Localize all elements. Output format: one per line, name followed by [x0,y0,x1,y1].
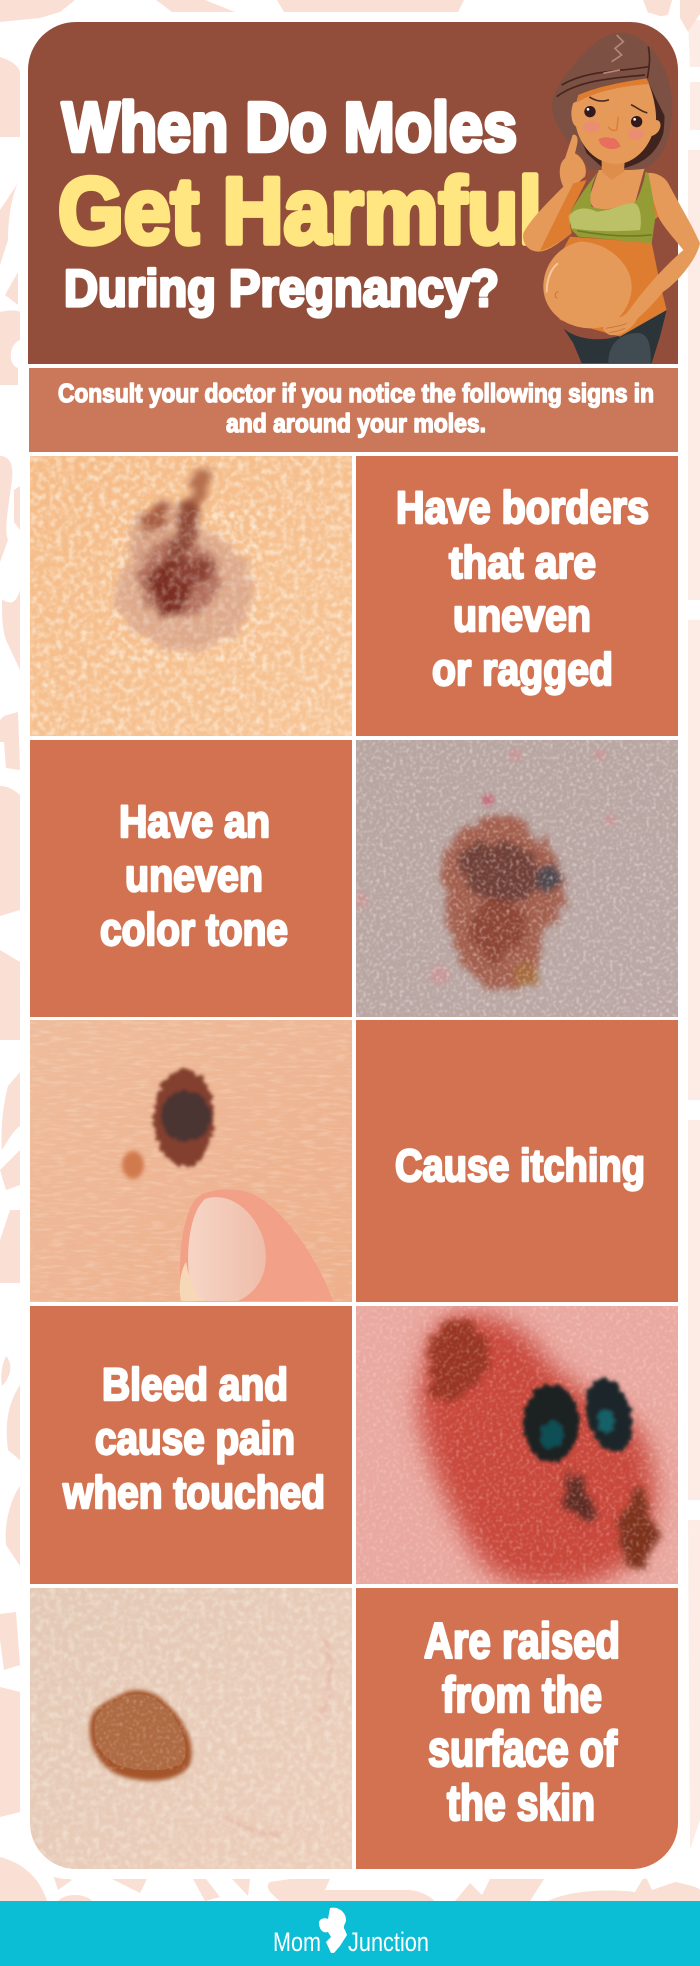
tile: cause itching [356,1020,678,1302]
photo: mole with uneven color [352,740,678,1017]
tile text line: Have borders [396,482,649,533]
belly [543,242,632,328]
tile text line: the skin [447,1775,595,1831]
tile text line: Cause itching [395,1140,645,1191]
title panel [28,22,678,364]
photo: dark mole beside fingertip [30,1020,352,1302]
logo wordmark: Mom: Mom [273,1927,321,1957]
title line: During Pregnancy?: During Pregnancy? [64,260,499,318]
intro text line 2: and around your moles. [226,408,486,438]
mouth [598,137,621,149]
fingertip [180,1189,333,1301]
tile text line: from the [442,1667,602,1723]
hair back [552,33,672,170]
pink speckles [352,748,616,985]
small spot [122,1151,144,1179]
eyes and brows [584,97,647,127]
illustration: pregnant woman touching her cheek [523,33,700,363]
MomJunction logo [273,1908,429,1957]
title line: When Do Moles: When Do Moles [62,88,517,166]
mole [441,816,566,991]
right arm and hand [603,173,700,335]
tile text line: color tone [100,904,288,955]
tile text line: that are [449,537,596,588]
left arm and raised finger [523,135,586,252]
tile: bleed and cause pain [30,1306,352,1584]
tile: raised from the skin [356,1588,678,1869]
intro banner [29,368,678,452]
footer band [0,1901,700,1966]
logo icon: mother and child [319,1908,347,1953]
tile: uneven color tone [30,740,352,1017]
neck [602,157,625,180]
photo: bleeding lesion [356,1306,678,1588]
tile: borders uneven or ragged [356,456,678,736]
nose [608,117,618,130]
hair fringe [552,33,672,137]
cheeks [583,121,600,132]
photo: mole with ragged borders [30,456,352,736]
tile text line: or ragged [432,644,613,695]
tile text line: Have an [119,796,270,847]
tile text line: uneven [453,590,591,641]
mole spread [117,465,253,650]
photo: raised round mole [30,1588,352,1869]
torso [543,237,667,337]
red lesion area [418,1315,655,1588]
title line: Get Harmful: Get Harmful [58,158,542,263]
logo wordmark: Junction: Junction [348,1927,429,1957]
tile text line: surface of [428,1721,617,1777]
tile text line: Are raised [424,1613,620,1669]
chest [588,167,645,212]
tile text line: uneven [125,850,263,901]
pants [563,310,667,363]
mole [90,1690,192,1781]
tile text line: Bleed and [102,1359,288,1410]
hand on belly [603,313,640,335]
dark patches [523,1373,640,1462]
face [570,78,661,164]
tile text line: when touched [62,1467,325,1518]
green crop top [568,170,655,243]
mole [154,1069,214,1167]
tile text line: cause pain [95,1413,295,1464]
